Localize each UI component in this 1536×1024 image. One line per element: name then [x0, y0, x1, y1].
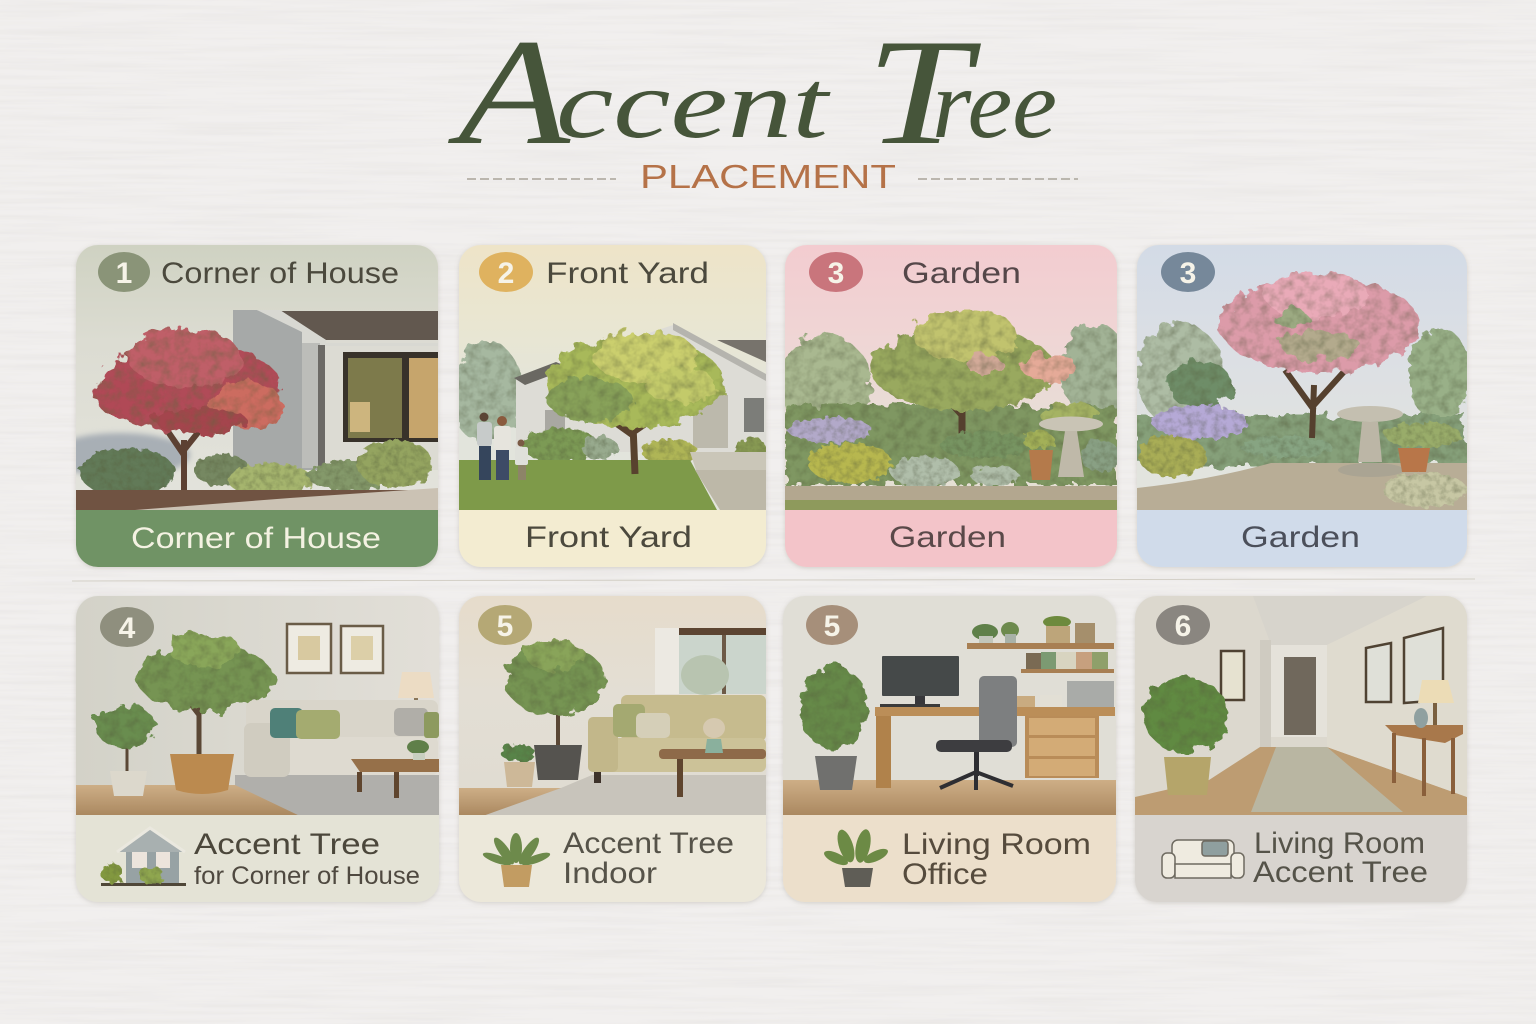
- mulch and path: [76, 488, 438, 510]
- accent tree: green: [547, 330, 723, 474]
- rug: [1251, 747, 1403, 812]
- floor: [1135, 747, 1467, 817]
- footer label: [1137, 510, 1467, 567]
- walkway: [695, 470, 766, 510]
- accent tree: blossom: [870, 309, 1078, 445]
- background foliage: [1136, 323, 1472, 467]
- badge 5: [806, 605, 858, 645]
- label: Accent Tree: [563, 827, 734, 860]
- panel: corner of house: [50, 245, 438, 567]
- desk: [875, 707, 1115, 788]
- panel: living room accent tree: [76, 596, 439, 902]
- badge 1: [98, 252, 150, 292]
- wall art: [287, 624, 383, 673]
- stone path: [785, 486, 1117, 510]
- badge 3: 3: [828, 257, 844, 290]
- coffee table: [351, 740, 439, 798]
- badge 6: 6: [1175, 610, 1191, 643]
- people: [477, 412, 528, 480]
- shrubs: [79, 440, 433, 497]
- heading: Corner of House: [161, 257, 399, 290]
- label: Accent Tree: [1253, 856, 1428, 889]
- console and lamp: [1385, 680, 1463, 796]
- title: [447, 8, 1057, 176]
- label: Office: [902, 858, 988, 891]
- label: [902, 828, 1091, 891]
- label: Living Room: [902, 828, 1091, 861]
- panel: indoor: [459, 596, 766, 902]
- footer label: [76, 510, 438, 567]
- label: [194, 828, 420, 890]
- accent tree: red maple: [98, 328, 283, 492]
- flower beds: [1138, 405, 1332, 477]
- accent tree: pink: [1220, 273, 1420, 438]
- flowers: [1383, 473, 1467, 507]
- badge 4: [100, 607, 154, 647]
- lamp: [398, 672, 434, 700]
- panel: hallway: [1135, 596, 1467, 902]
- label: Accent Tree: [194, 828, 380, 861]
- door: [1284, 657, 1316, 735]
- wall art: [1221, 628, 1443, 703]
- badge 1: 1: [116, 257, 132, 290]
- large potted tree: [137, 633, 273, 794]
- garden shrubs: [522, 428, 768, 466]
- bird bath: [1039, 416, 1103, 477]
- label: Living Room: [1254, 827, 1425, 860]
- footer label: Garden: [889, 521, 1006, 554]
- footer label: [785, 510, 1117, 567]
- badge 3: [1161, 252, 1215, 292]
- terracotta pot: [1385, 422, 1461, 472]
- right wall: [1327, 596, 1467, 797]
- badge 4: 4: [119, 612, 136, 645]
- badge 2: 2: [498, 257, 514, 290]
- title: A: [447, 8, 571, 176]
- heading: Garden: [902, 257, 1021, 290]
- footer label: Front Yard: [525, 521, 692, 554]
- icon: leafy plant: [822, 828, 890, 887]
- title: ccent: [556, 51, 832, 159]
- small potted tree: [95, 704, 155, 796]
- plant: [1144, 677, 1228, 795]
- subtitle: PLACEMENT: [640, 158, 896, 195]
- panel: garden, pink: [779, 245, 1131, 567]
- label: for Corner of House: [194, 862, 420, 890]
- shelves: [967, 616, 1114, 673]
- office chair: [936, 676, 1017, 790]
- badge 2: [479, 252, 533, 292]
- badge 3: [809, 252, 863, 292]
- stone path: [1137, 463, 1467, 510]
- background tree: [459, 340, 522, 442]
- label: [563, 827, 734, 890]
- footer label: Corner of House: [131, 522, 381, 555]
- footer label: Garden: [1241, 521, 1360, 554]
- icon: house: [101, 828, 186, 886]
- label: Indoor: [563, 857, 657, 890]
- footer label: [459, 510, 766, 567]
- coffee table: [659, 718, 766, 797]
- house with window: [233, 310, 438, 470]
- panel: office: [783, 596, 1116, 902]
- icon: potted plant: [482, 833, 551, 887]
- badge 6: [1156, 605, 1210, 645]
- window: [655, 628, 766, 695]
- monitor: [880, 656, 959, 707]
- background foliage: [779, 324, 1131, 485]
- flower beds: [788, 417, 1120, 488]
- sofa: [588, 695, 766, 783]
- potted tree: [505, 640, 605, 780]
- lawn: [459, 460, 717, 510]
- terracotta pot: [1022, 431, 1054, 480]
- far wall and ceiling: [1253, 596, 1427, 645]
- small plant: [501, 744, 535, 787]
- badge 5: 5: [824, 610, 840, 643]
- title: ree: [932, 51, 1057, 159]
- panel: front yard: [450, 245, 768, 567]
- desk items: [1015, 681, 1114, 707]
- panel: garden, blue: [1136, 245, 1472, 567]
- plant: [800, 666, 868, 790]
- icon: sofa: [1162, 840, 1244, 878]
- badge 3: 3: [1180, 257, 1196, 290]
- house: [514, 323, 766, 452]
- heading: Front Yard: [546, 257, 709, 290]
- bird bath: [1337, 406, 1404, 477]
- label: [1253, 827, 1428, 889]
- title: T: [866, 8, 982, 176]
- badge 5: 5: [497, 610, 513, 643]
- sofa: [244, 700, 439, 777]
- badge 5: [478, 605, 532, 645]
